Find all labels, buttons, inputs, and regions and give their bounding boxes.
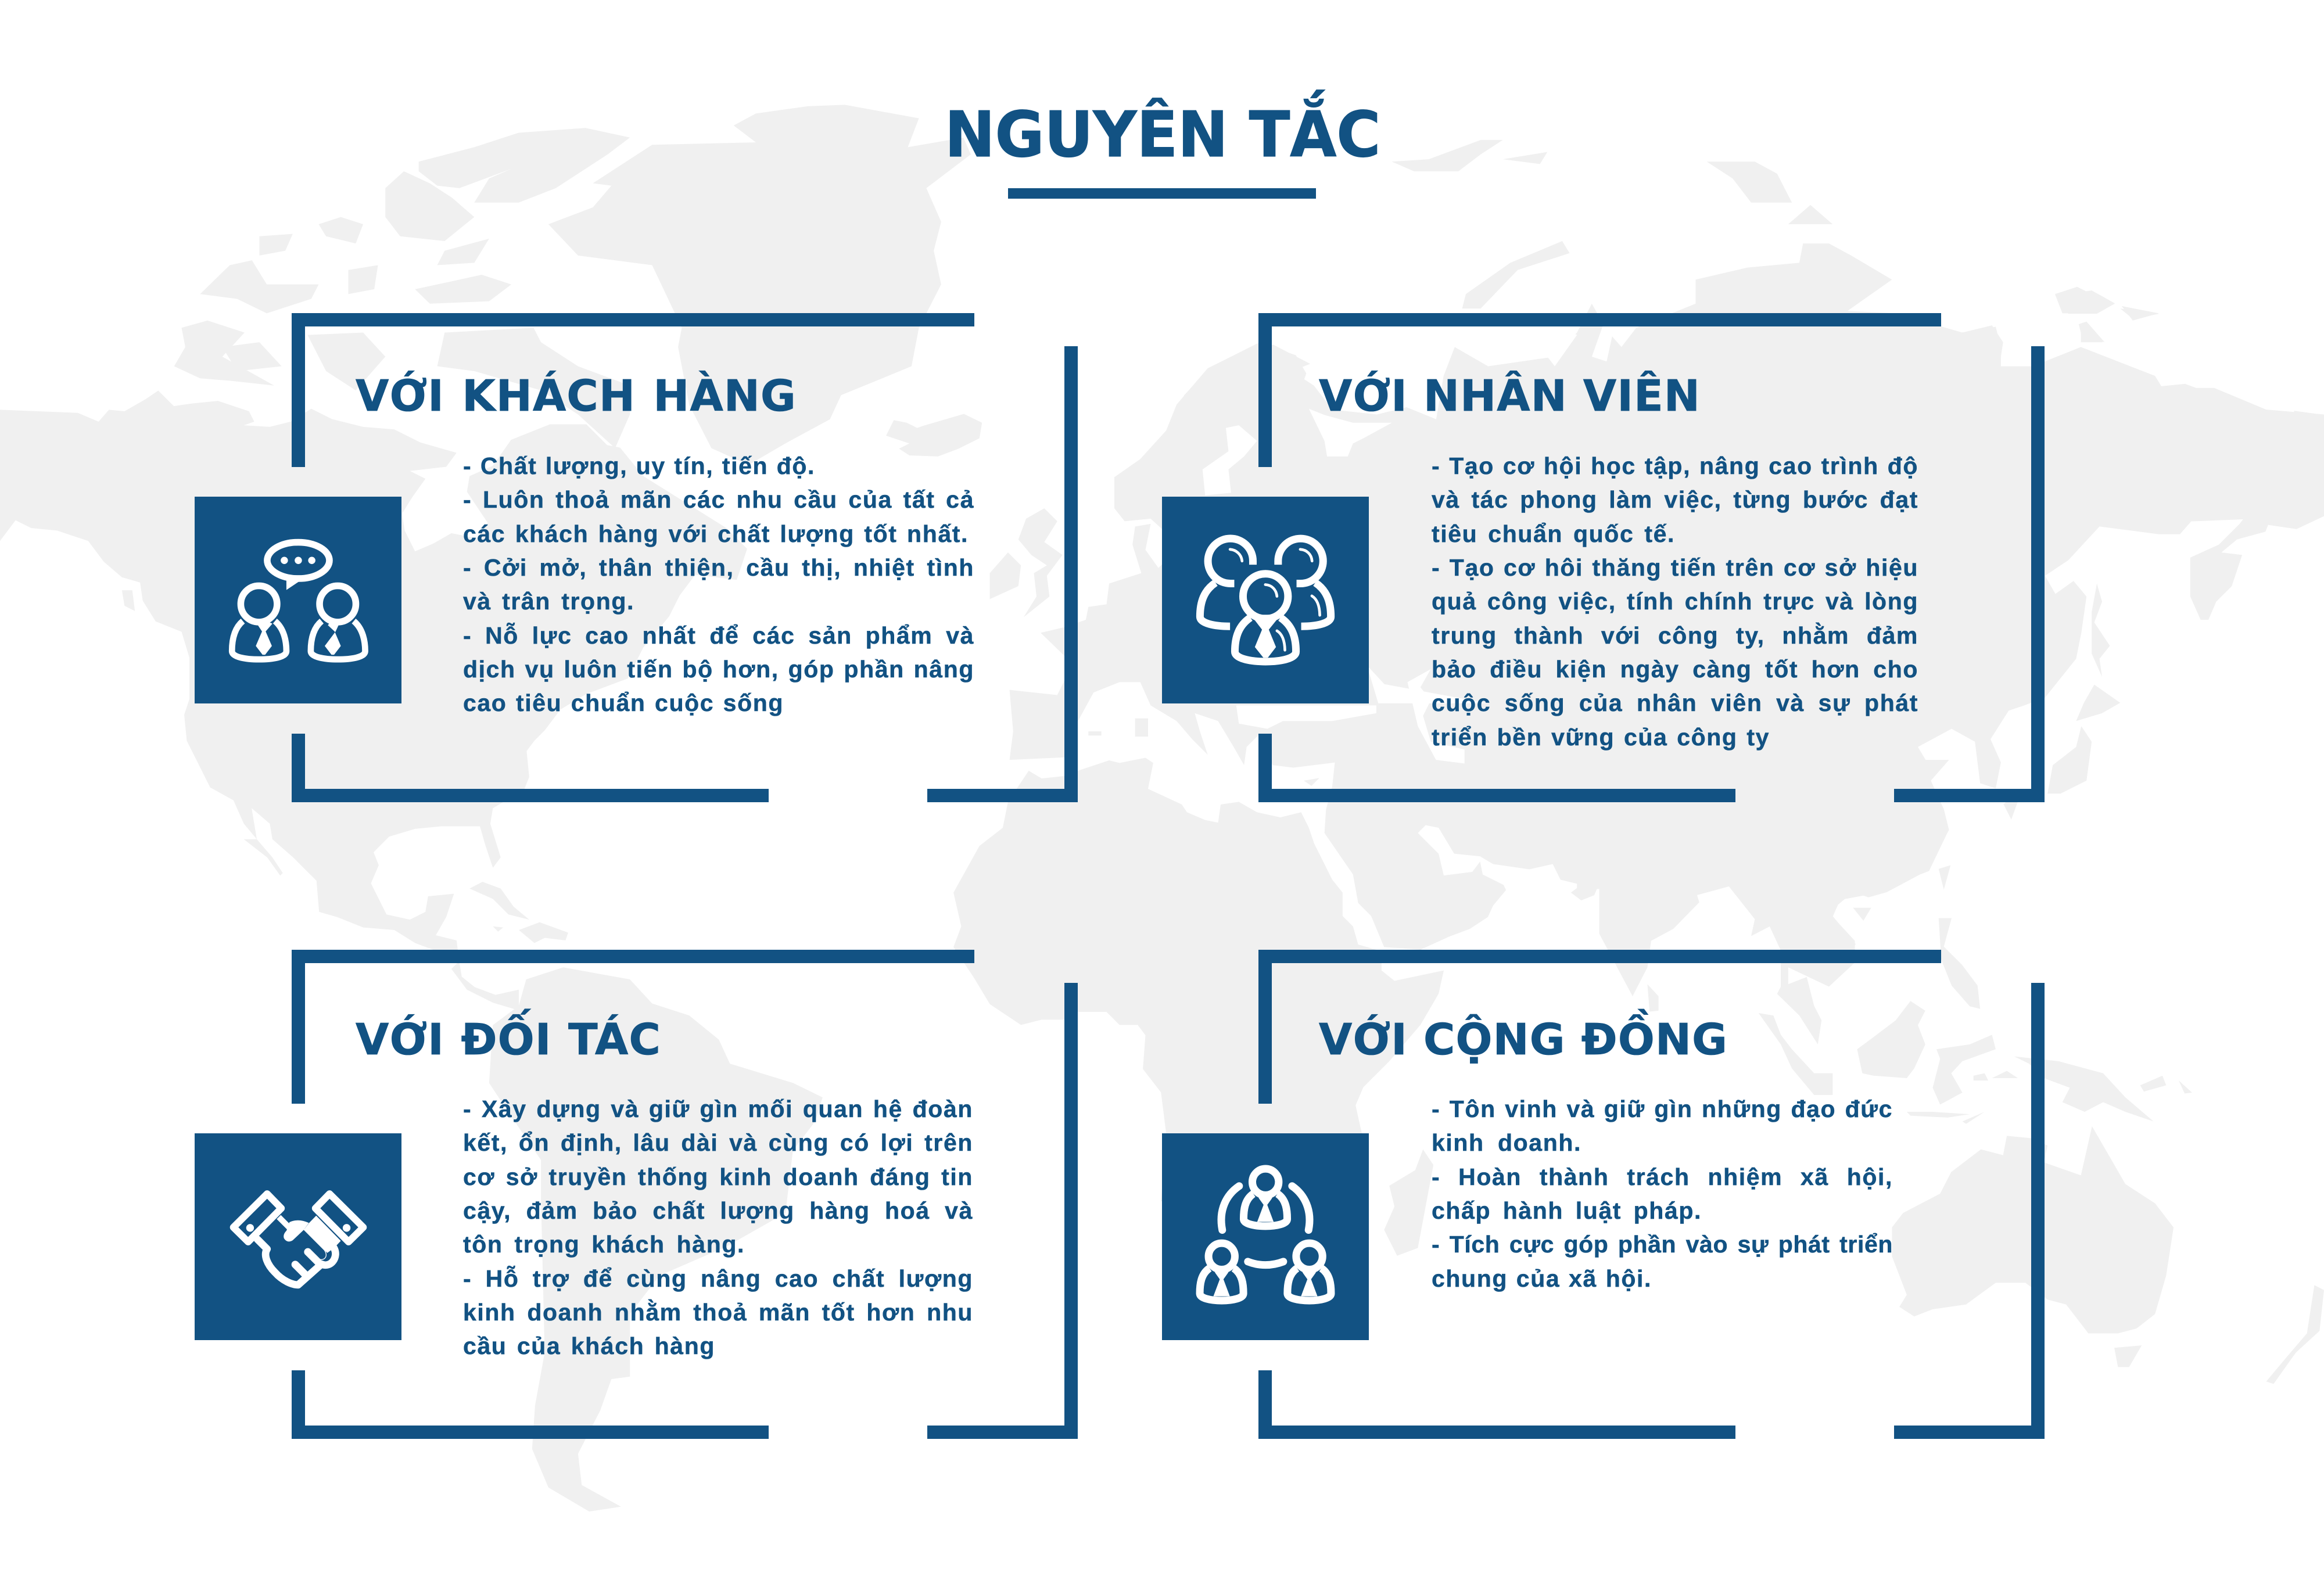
text block: và trân trọng. (463, 588, 634, 615)
text block: kinh doanh nhằm thoả mãn tốt hơn nhu (463, 1299, 973, 1326)
text block: - Nỗ lực cao nhất để các sản phẩm và (463, 622, 974, 649)
text block: cầu của khách hàng (463, 1333, 715, 1359)
text block: bảo điều kiện ngày càng tốt hơn cho (1432, 656, 1918, 683)
text block: - Chất lượng, uy tín, tiến độ. (463, 453, 815, 479)
text block (463, 1096, 973, 1359)
text block: kinh doanh. (1432, 1129, 1581, 1156)
text block: cuộc sống của nhân viên và sự phát (1432, 690, 1918, 716)
icon: team of three (1162, 497, 1369, 703)
panel frame (1258, 950, 2045, 1439)
panel: với nhân viên (1162, 313, 2045, 802)
text block: quả công việc, tính chính trực và lòng (1432, 588, 1918, 615)
text block: - Tích cực góp phần vào sự phát triển (1432, 1231, 1893, 1258)
icon: community network (1162, 1133, 1369, 1340)
text block: chung của xã hội. (1432, 1265, 1652, 1292)
text block: cậy, đảm bảo chất lượng hàng hoá và (463, 1197, 973, 1224)
heading: VỚI NHÂN VIÊN (1319, 371, 1701, 421)
text block: tiêu chuẩn quốc tế. (1432, 520, 1675, 547)
text block: tôn trọng khách hàng. (463, 1231, 745, 1258)
text block: - Hỗ trợ để cùng nâng cao chất lượng (463, 1265, 973, 1292)
text block (1432, 1096, 1893, 1292)
title underline (1008, 188, 1316, 199)
text block: - Tạo cơ hôi thăng tiến trên cơ sở hiệu (1432, 554, 1918, 581)
text block: trung thành với công ty, nhằm đảm (1432, 622, 1918, 649)
panel frame (1258, 313, 2045, 802)
icon: handshake (195, 1133, 401, 1340)
text block (1432, 453, 1918, 751)
text block: - Luôn thoả mãn các nhu cầu của tất cả (463, 486, 974, 513)
text block: - Tôn vinh và giữ gìn những đạo đức (1432, 1096, 1893, 1122)
text block (462, 453, 974, 716)
text block: cao tiêu chuẩn cuộc sống (463, 690, 784, 716)
panel: với đối tác (195, 950, 1078, 1439)
text block: - Xây dựng và giữ gìn mối quan hệ đoàn (463, 1096, 973, 1122)
text block: - Cởi mở, thân thiện, cầu thị, nhiệt tình (463, 554, 974, 581)
heading: VỚI KHÁCH HÀNG (356, 371, 797, 421)
text block: chấp hành luật pháp. (1432, 1197, 1702, 1224)
panel frame (292, 313, 1078, 802)
text block: triển bền vững của công ty (1432, 724, 1770, 751)
heading: VỚI CỘNG ĐỒNG (1319, 1015, 1728, 1065)
panel: với cộng đồng (1162, 950, 2045, 1439)
text block: dịch vụ luôn tiến bộ hơn, góp phần nâng (463, 656, 974, 683)
icon: two people talking (195, 497, 401, 703)
panel: với khách hàng (195, 313, 1078, 802)
panel frame (292, 950, 1078, 1439)
title: NGUYÊN TẮC (945, 99, 1380, 171)
text block: cơ sở truyền thống kinh doanh đáng tin (463, 1164, 973, 1190)
text block: - Hoàn thành trách nhiệm xã hội, (1432, 1164, 1893, 1190)
text block: - Tạo cơ hội học tập, nâng cao trình độ (1432, 453, 1918, 479)
text block: các khách hàng với chất lượng tốt nhất. (463, 520, 969, 547)
text block: kết, ổn định, lâu dài và cùng có lợi trên (463, 1129, 973, 1156)
heading: VỚI ĐỐI TÁC (356, 1015, 661, 1065)
text block: và tác phong làm việc, từng bước đạt (1432, 486, 1918, 513)
